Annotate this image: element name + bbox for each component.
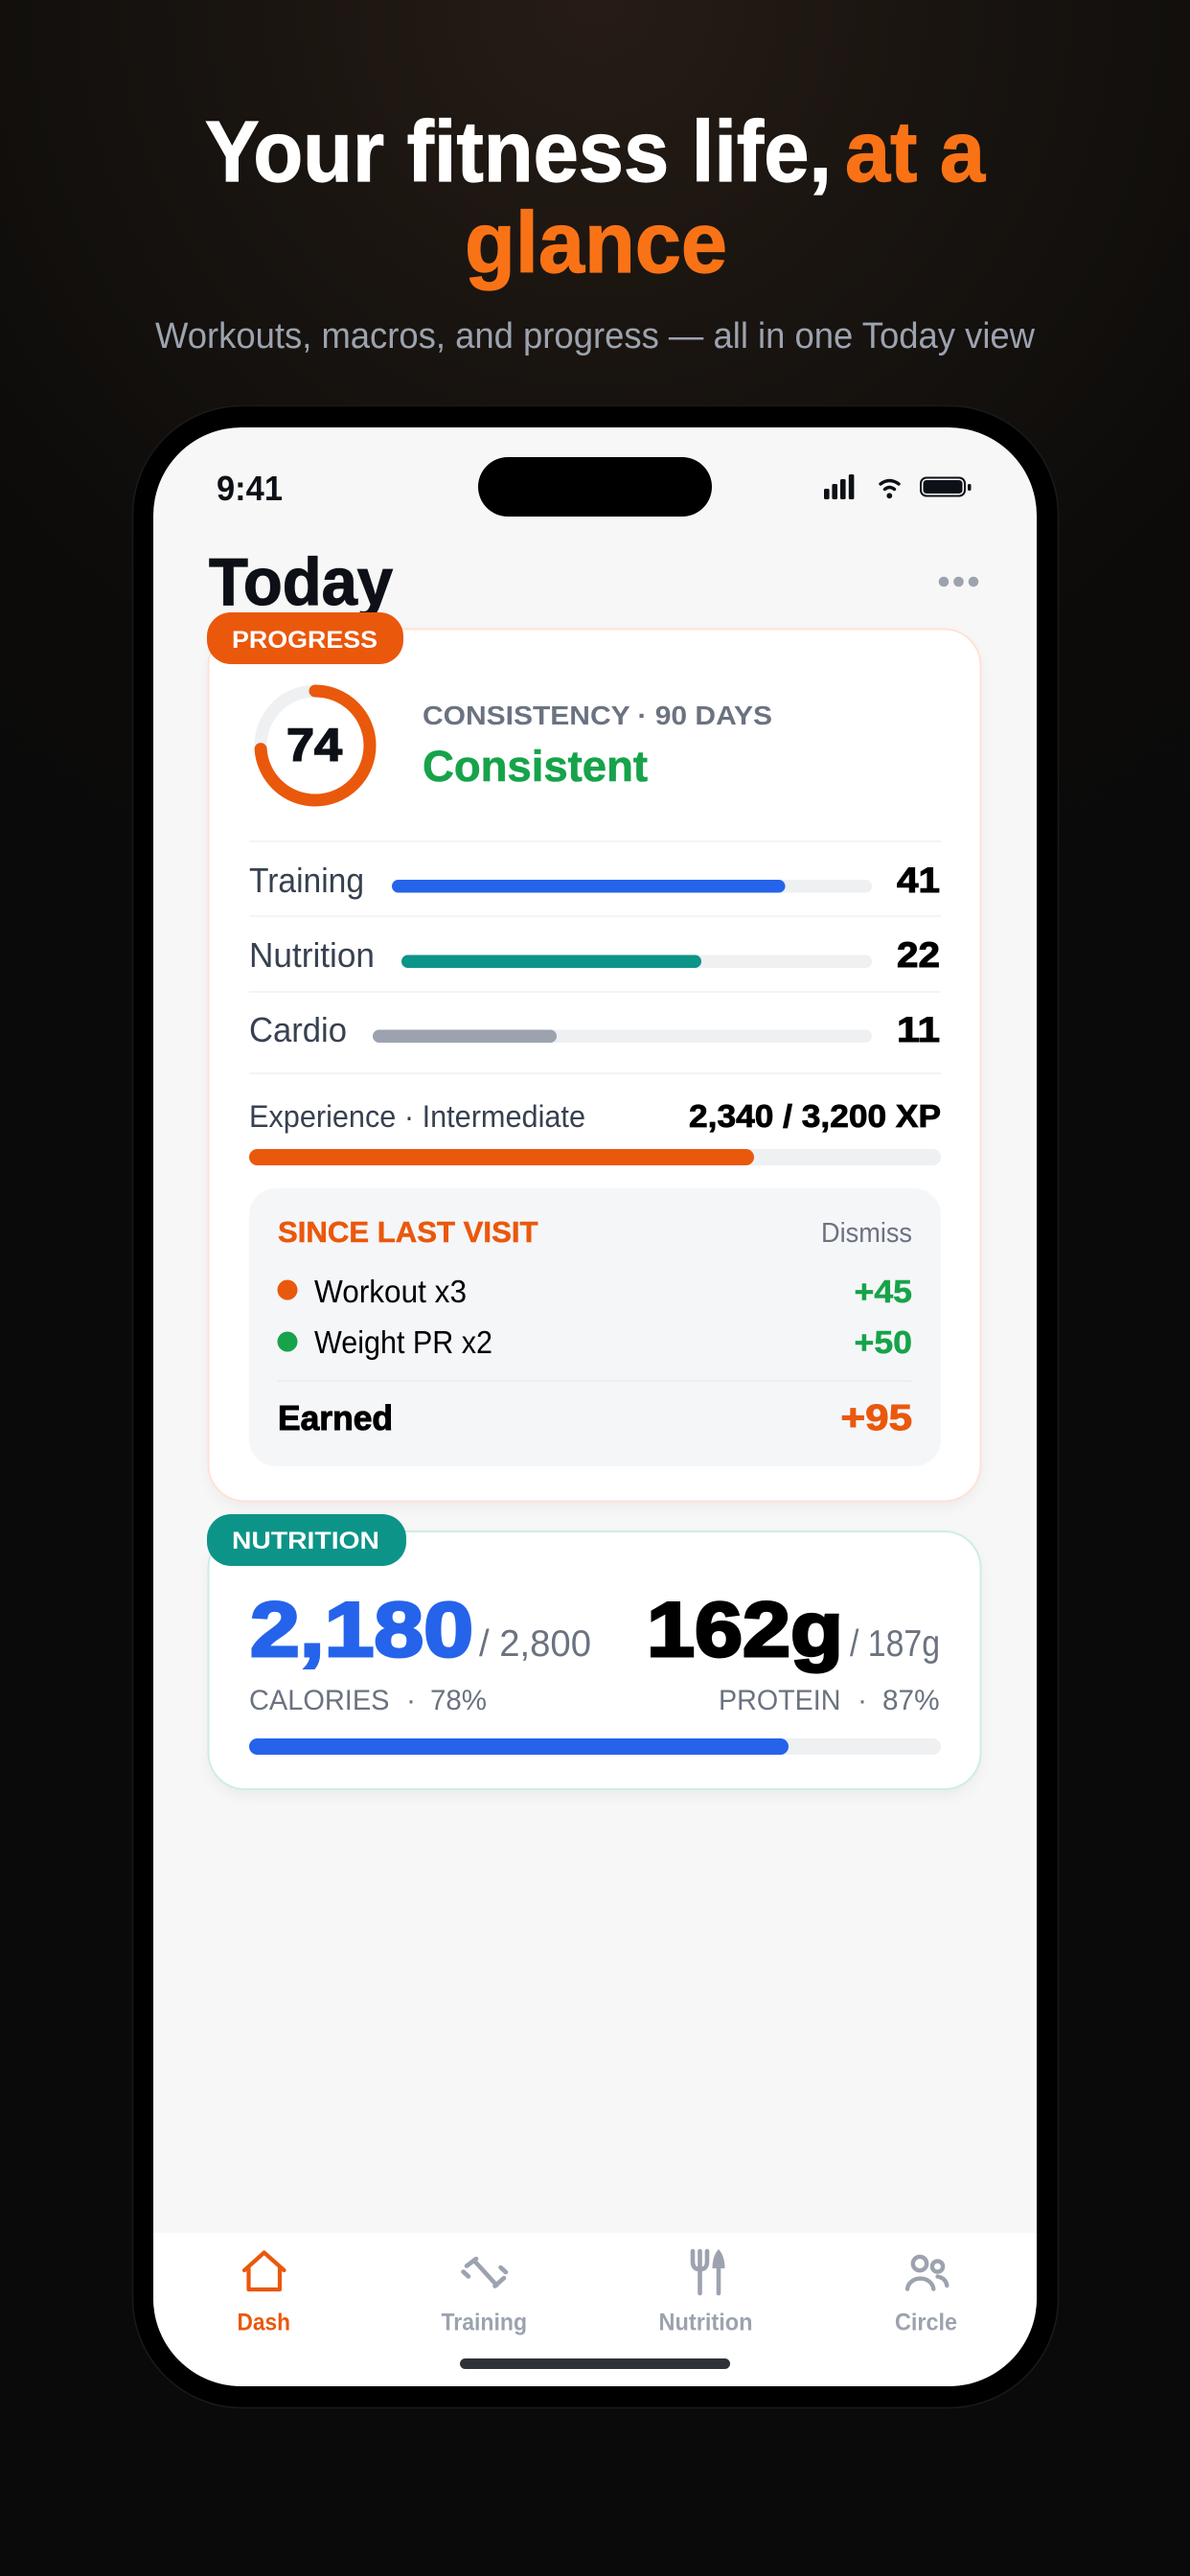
tab: Dash: Dash [238, 2310, 290, 2336]
tab: Circle [895, 2257, 957, 2336]
dynamic island [478, 457, 712, 517]
badge: nutrition: NUTRITION [232, 1528, 379, 1554]
item: workout [278, 1274, 912, 1309]
icon: fork and knife [693, 2249, 724, 2293]
item: weight PR [278, 1324, 912, 1360]
tab: Training [441, 2259, 527, 2336]
earned total: Earned [278, 1398, 393, 1438]
badge: progress [207, 612, 403, 664]
phone frame [132, 406, 1058, 2407]
row: nutrition [249, 935, 940, 975]
row: nutrition: Nutrition [249, 935, 375, 975]
calories value: / 2,800 [479, 1623, 591, 1665]
calories label: 78% [430, 1685, 487, 1716]
item: weight PR: +50 [855, 1324, 912, 1360]
panel: nutrition [207, 1514, 981, 1796]
protein label: PROTEIN [719, 1685, 841, 1716]
row: training: Training [249, 861, 364, 900]
since last visit panel [249, 1188, 941, 1466]
row: nutrition: 22 [897, 935, 940, 975]
score ring [261, 691, 370, 800]
item: workout: +45 [855, 1274, 912, 1309]
row: cardio: Cardio [249, 1010, 347, 1049]
row: cardio: 11 [897, 1010, 940, 1049]
tab: Nutrition [659, 2249, 753, 2336]
protein label: 87% [882, 1685, 939, 1716]
title: Your fitness life, [205, 104, 832, 200]
experience row [249, 1098, 941, 1165]
calories value [250, 1587, 591, 1673]
protein label [719, 1685, 939, 1716]
icon: signal [824, 474, 854, 499]
phone screen [153, 427, 1037, 2386]
since last visit panel: SINCE LAST VISIT [278, 1215, 538, 1249]
icon: dumbbell [464, 2259, 506, 2287]
consistency label: CONSISTENCY · 90 DAYS [423, 701, 772, 730]
tab: Training: Training [441, 2310, 527, 2336]
tab: Nutrition: Nutrition [659, 2310, 753, 2336]
home indicator [460, 2358, 730, 2369]
protein value: / 187g [850, 1623, 940, 1665]
tab: Dash [238, 2252, 290, 2336]
row: training [249, 861, 940, 900]
time: 9:41 [217, 469, 283, 508]
icon: wifi [881, 481, 899, 498]
item: weight PR: Weight PR x2 [314, 1324, 492, 1360]
protein value [647, 1587, 940, 1673]
experience row: Experience · Intermediate [249, 1099, 585, 1134]
icon: home [244, 2252, 284, 2289]
protein value: 162g [647, 1587, 843, 1673]
consistency status: Consistent [423, 742, 648, 791]
icon: more dots [939, 577, 978, 586]
earned total [278, 1398, 912, 1438]
status bar [217, 469, 972, 508]
since last visit panel: Dismiss [821, 1218, 912, 1249]
badge: progress: PROGRESS [232, 627, 378, 654]
calories label: CALORIES [249, 1685, 389, 1716]
item: workout: Workout x3 [314, 1274, 467, 1309]
phone mockup [132, 406, 1058, 2407]
row: cardio [249, 1010, 940, 1049]
earned total: +95 [841, 1398, 912, 1438]
icon: battery [921, 477, 972, 496]
calories value: 2,180 [250, 1587, 473, 1673]
tab bar [153, 2248, 1037, 2386]
nutrition card [209, 1531, 981, 1789]
badge: nutrition [207, 1514, 406, 1566]
experience row: 2,340 / 3,200 XP [689, 1098, 941, 1134]
icon: people [907, 2257, 947, 2288]
calories label [249, 1685, 487, 1716]
score ring: 74 [286, 721, 342, 771]
calories label: · [406, 1685, 416, 1716]
calories progress bar [249, 1738, 941, 1755]
panel: progress [207, 612, 981, 1506]
title [205, 104, 986, 291]
heading: Today: Today [209, 544, 393, 619]
protein label: · [858, 1685, 867, 1716]
subtitle: Workouts, macros, and progress — all in one Today view [155, 316, 1036, 356]
tab: Circle: Circle [895, 2310, 957, 2336]
title: at a [845, 104, 986, 200]
row: training: 41 [897, 861, 940, 900]
progress card [209, 629, 981, 1501]
title: glance [465, 196, 727, 291]
